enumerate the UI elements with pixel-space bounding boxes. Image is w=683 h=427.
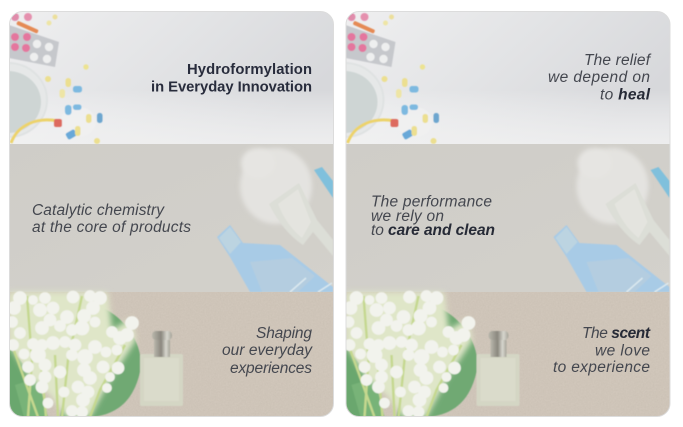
panel: left column — [0, 11, 334, 417]
text: shaping our everyday experiences: Shaping — [256, 325, 312, 342]
text: shaping our everyday experiences: experiences — [230, 360, 312, 377]
text: shaping our everyday experiences: our everyday — [222, 342, 313, 359]
title — [151, 62, 312, 96]
text: the scent we love to experience — [553, 325, 651, 376]
panel: right column — [306, 11, 670, 417]
text: shaping our everyday experiences — [222, 325, 313, 377]
title: Hydroformylation — [187, 62, 312, 78]
text: the performance we rely on to care and clean: we rely on — [371, 208, 444, 225]
text: the performance we rely on to care and clean — [371, 194, 495, 239]
title: in Everyday Innovation — [151, 80, 312, 96]
text: the scent we love to experience: we love — [595, 342, 650, 360]
text: catalytic chemistry: at the core of products — [32, 219, 191, 236]
text: the performance we rely on to care and clean: to care and clean — [371, 222, 495, 239]
text: the relief we depend on to heal: to heal — [600, 86, 651, 104]
text: the relief we depend on to heal: we depend on — [548, 69, 650, 86]
text: the relief we depend on to heal: The relief — [584, 52, 652, 69]
text: catalytic chemistry — [32, 202, 191, 236]
text: the performance we rely on to care and clean: The performance — [371, 194, 492, 210]
text: the scent we love to experience: to experience — [553, 359, 650, 376]
text: the relief we depend on to heal — [548, 52, 652, 104]
text: catalytic chemistry: Catalytic chemistry — [32, 202, 165, 219]
text: the scent we love to experience: The scent — [582, 325, 651, 342]
